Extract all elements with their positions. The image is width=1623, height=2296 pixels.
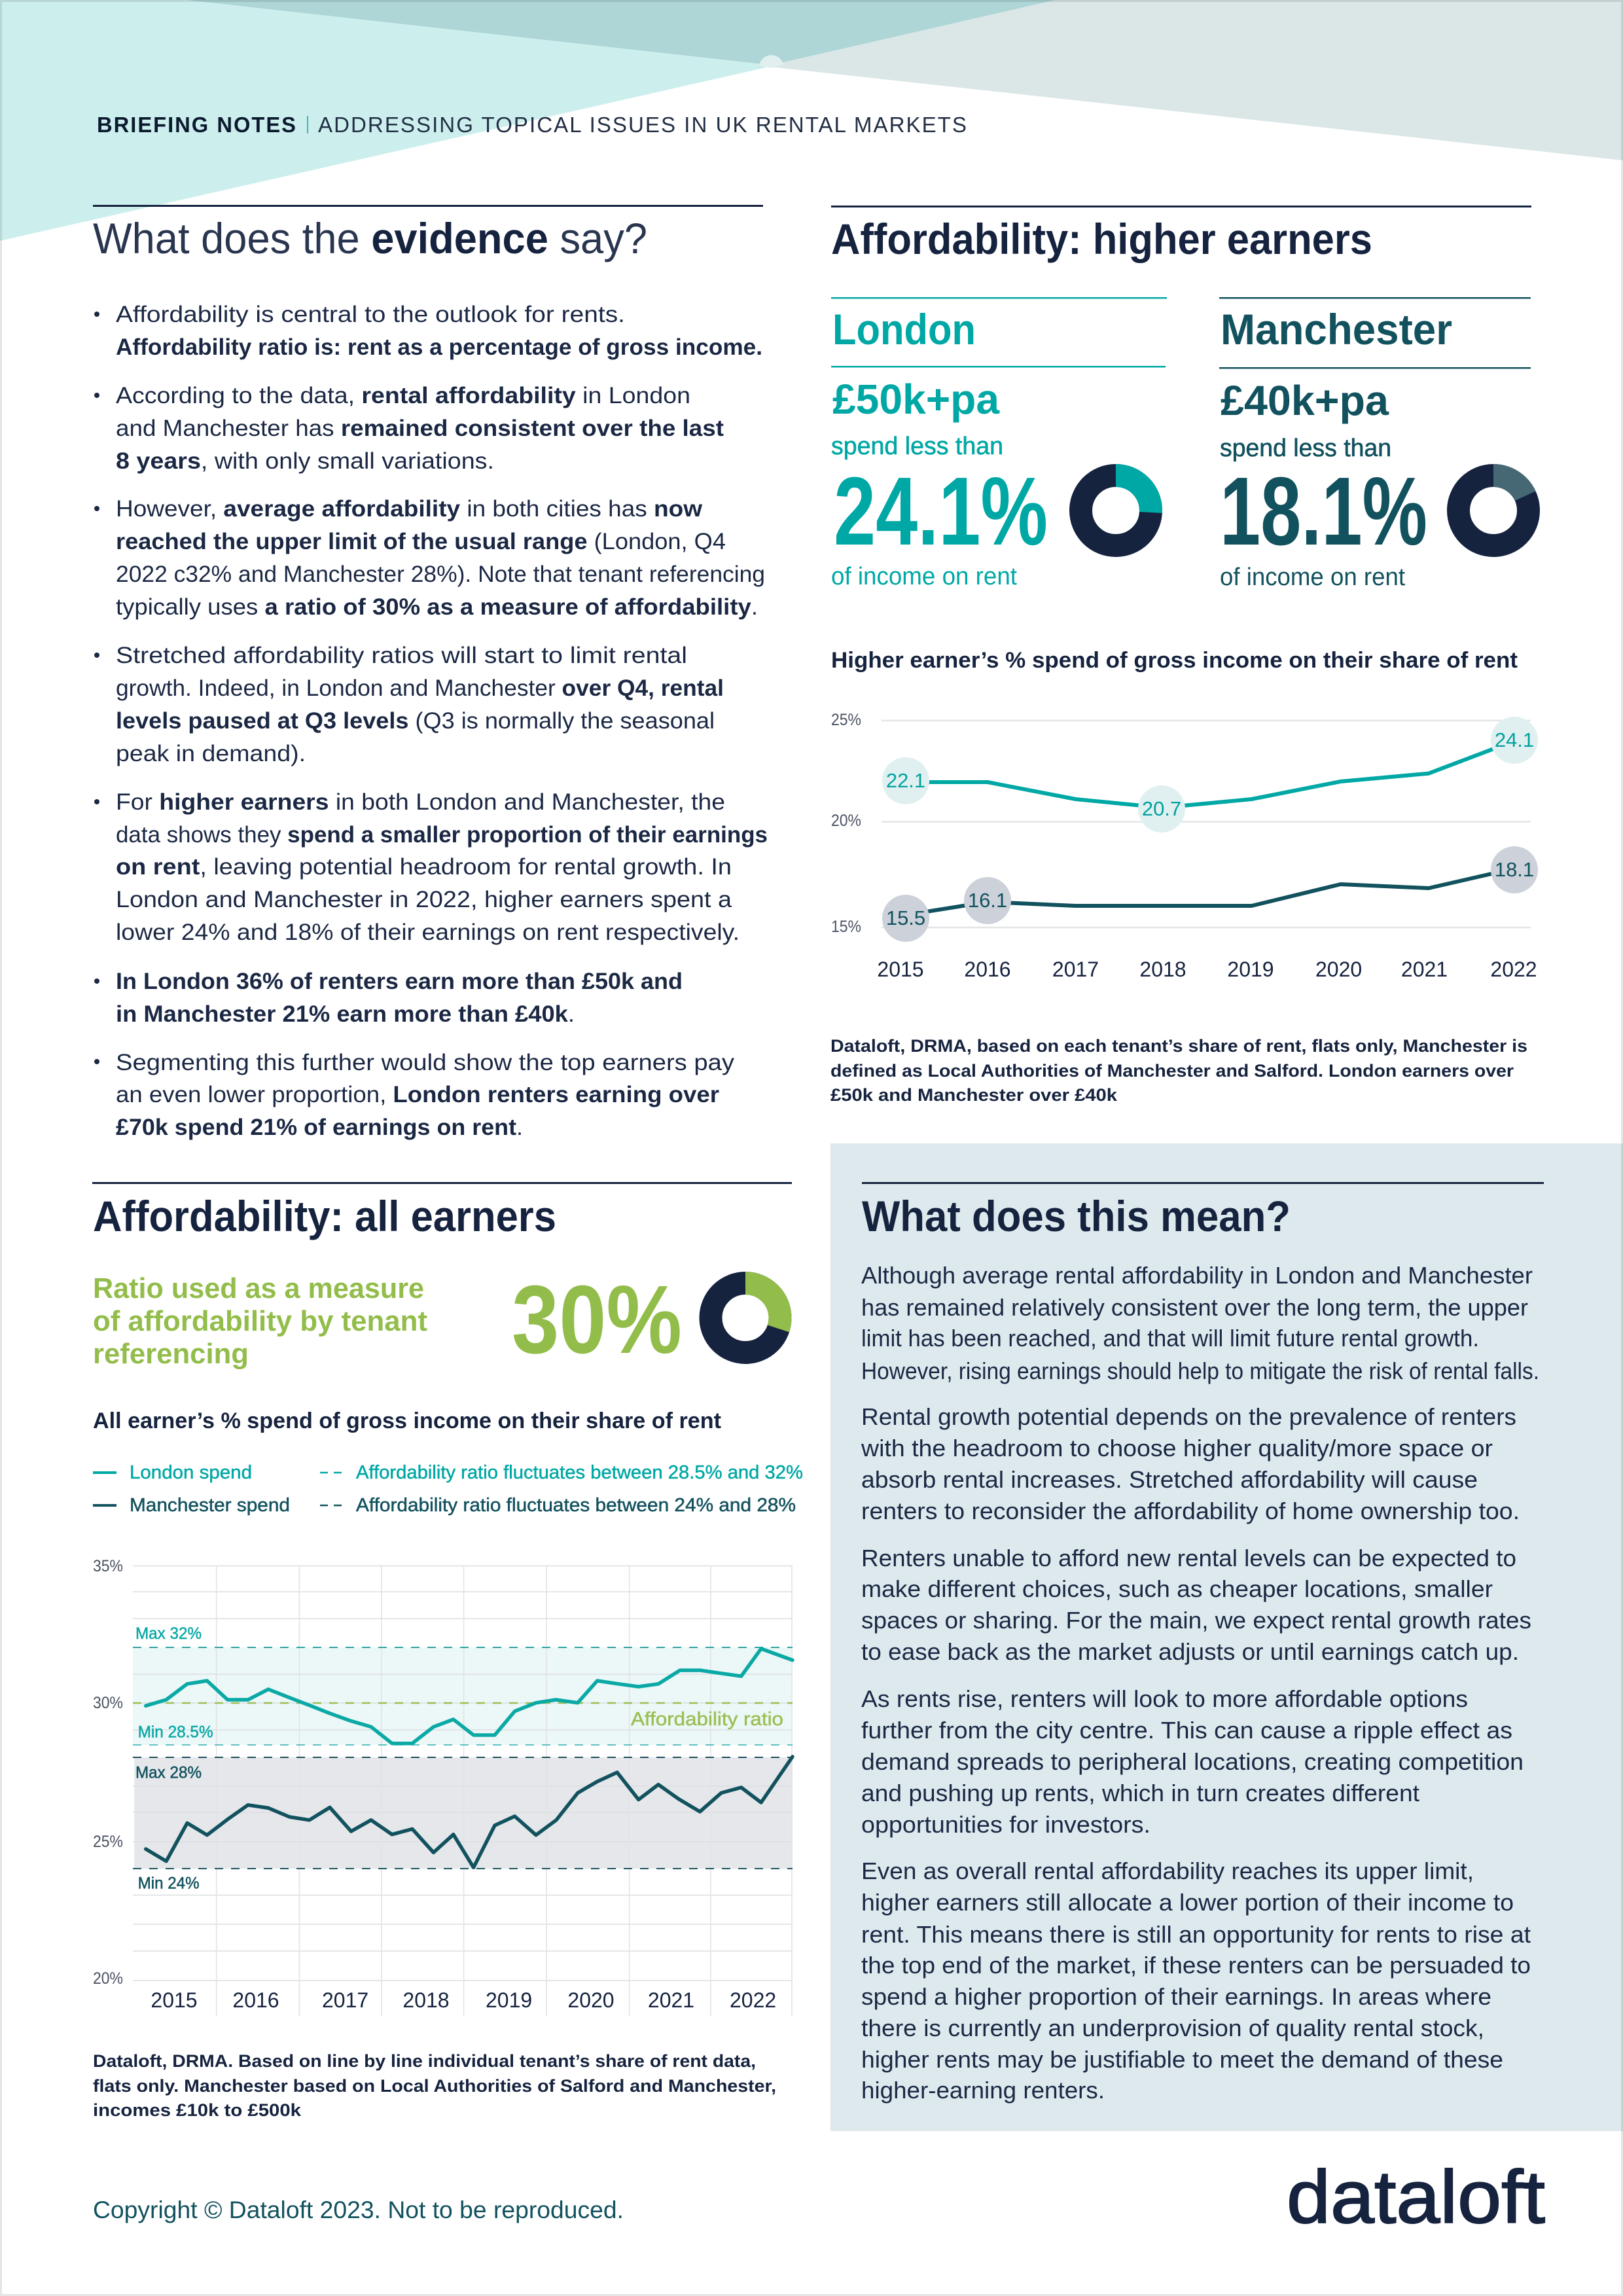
bullet list: Affordability is central to the outlook for rents.	[116, 302, 625, 327]
paragraph text: opportunities for investors.	[861, 1811, 1150, 1838]
stat: London: 24.1%	[834, 457, 1048, 565]
panel: affordability higher earners	[830, 206, 1538, 1105]
donut: Manchester 18.1%	[1458, 475, 1529, 546]
x axis years: 2019	[1227, 958, 1274, 981]
panel: what does this mean	[830, 1143, 1623, 2131]
source note: higher earners: defined as Local Authorities of Manchester and Salford. London earners over	[830, 1061, 1514, 1081]
bullet list: data shows they spend a smaller proportion of their earnings	[116, 822, 768, 848]
paragraph text: and pushing up rents, which in turn creates different	[861, 1780, 1419, 1806]
band: London range	[133, 1647, 793, 1745]
paragraph text: the top end of the market, if these renters can be persuaded to	[861, 1952, 1531, 1979]
x axis years: 2022	[1490, 958, 1537, 981]
stat label: ratio: of affordability by tenant	[93, 1305, 427, 1337]
paragraph text: higher rents may be justifiable to meet the demand of these	[861, 2046, 1503, 2073]
x axis years: 2016	[232, 1988, 279, 2012]
header title: BRIEFING NOTES	[97, 113, 297, 137]
paragraph text: spend a higher proportion of their earnings. In areas where	[861, 1983, 1491, 2010]
x axis years: 2019	[486, 1988, 532, 2012]
paragraph text: As rents rise, renters will look to more affordable options	[861, 1685, 1468, 1712]
bullet list: Affordability ratio is: rent as a percentage of gross income.	[116, 334, 762, 360]
heading: what does the evidence say: What does the evidence say?	[93, 214, 647, 262]
stat: London	[831, 297, 1167, 590]
y axis labels: 25%	[93, 1833, 123, 1851]
bullet list: For higher earners in both London and Manchester, the	[116, 789, 725, 815]
heading: affordability all earners: Affordability: all earners	[93, 1192, 556, 1240]
x axis years: 2020	[567, 1988, 615, 2012]
bullet list	[94, 302, 768, 1140]
range labels: Max 28%	[135, 1763, 202, 1782]
data bubbles: 18.1	[1495, 858, 1534, 881]
x axis years: 2018	[402, 1988, 450, 2012]
legend: London spend	[130, 1462, 252, 1483]
data bubbles: 16.1	[968, 889, 1007, 912]
paragraph text: absorb rental increases. Stretched affordability will cause	[861, 1466, 1478, 1493]
paragraph text: make different choices, such as cheaper locations, smaller	[861, 1575, 1493, 1602]
stat: London: £50k+pa	[832, 376, 999, 423]
x axis years: 2020	[1315, 958, 1362, 981]
stat: Manchester: Manchester	[1221, 305, 1452, 353]
paragraph text: with the headroom to choose higher quality/more space or	[861, 1435, 1493, 1462]
paragraph text: demand spreads to peripheral locations, creating competition	[861, 1748, 1524, 1775]
footer copyright: Copyright © Dataloft 2023. Not to be reproduced.	[93, 2197, 624, 2223]
line: London spend	[146, 1649, 793, 1744]
bullet list: in Manchester 21% earn more than £40k .	[116, 1001, 575, 1027]
stat: London: spend less than	[831, 433, 1003, 460]
y axis labels: 20%	[831, 812, 861, 830]
paragraph text: Renters unable to afford new rental levels can be expected to	[861, 1545, 1516, 1571]
y axis labels	[93, 1557, 123, 1988]
chart title: higher earners: Higher earner’s % spend of gross income on their share of rent	[831, 648, 1518, 673]
bullet list: and Manchester has remained consistent over the last	[116, 416, 724, 441]
stat label: ratio	[93, 1272, 427, 1370]
x axis years	[877, 958, 1537, 981]
line: London	[906, 741, 1514, 808]
data bubbles	[882, 717, 1538, 942]
bullet list: £70k spend 21% of earnings on rent .	[116, 1115, 523, 1140]
legend	[93, 1462, 803, 1516]
stat label: ratio: referencing	[93, 1338, 249, 1370]
panel: affordability all earners	[92, 1182, 803, 2120]
x axis years: 2021	[1401, 958, 1448, 981]
stat: Manchester	[1219, 297, 1531, 591]
y axis labels	[831, 711, 861, 936]
x axis years: 2017	[322, 1988, 368, 2012]
paragraph text: Even as overall rental affordability reaches its upper limit,	[861, 1857, 1474, 1884]
source note: all earners: incomes £10k to £500k	[93, 2100, 302, 2120]
data bubbles: 15.5	[886, 906, 925, 929]
paragraph text	[861, 1262, 1539, 2104]
bullet list: 2022 c32% and Manchester 28%). Note that tenant referencing	[116, 562, 765, 587]
source note: higher earners: Dataloft, DRMA, based on each tenant’s share of rent, flats only, Manchester is	[830, 1036, 1527, 1056]
paragraph text: there is currently an underprovision of quality rental stock,	[861, 2015, 1484, 2041]
stat: London: London	[832, 305, 976, 353]
bullet list: However, average affordability in both cities has now	[116, 496, 703, 522]
x axis years	[151, 1988, 776, 2012]
stat: 30%: 30%	[512, 1266, 682, 1374]
line chart: all earners	[93, 1557, 793, 2016]
source note: higher earners	[830, 1036, 1527, 1105]
source note: higher earners: £50k and Manchester over £40k	[830, 1085, 1118, 1105]
bullet list: peak in demand).	[116, 741, 306, 766]
x axis years: 2022	[730, 1988, 776, 2012]
paragraph text: However, rising earnings should help to mitigate the risk of rental falls.	[861, 1357, 1539, 1384]
paragraph text: spaces or sharing. For the main, we expect rental growth rates	[861, 1607, 1531, 1634]
range labels: Min 24%	[138, 1874, 200, 1893]
bullet list: 8 years , with only small variations.	[116, 448, 494, 474]
line: Manchester spend	[146, 1757, 793, 1867]
range labels: Min 28.5%	[138, 1723, 213, 1741]
legend: Affordability ratio fluctuates between 28.5% and 32%	[356, 1462, 803, 1483]
paragraph text: limit has been reached, and that will limit future rental growth.	[861, 1325, 1479, 1352]
stat label: ratio: Ratio used as a measure	[93, 1272, 424, 1304]
x axis years: 2016	[964, 958, 1011, 981]
heading: affordability higher earners: Affordability: higher earners	[831, 215, 1372, 263]
paragraph text: Although average rental affordability in London and Manchester	[861, 1262, 1533, 1289]
paragraph text: has remained relatively consistent over the long term, the upper	[861, 1294, 1528, 1321]
line chart: higher earners	[831, 711, 1538, 981]
x axis years: 2021	[648, 1988, 694, 2012]
stat: London: of income on rent	[831, 563, 1017, 590]
data bubbles: 22.1	[886, 769, 925, 792]
data bubbles: 20.7	[1142, 797, 1181, 820]
paragraph text: Rental growth potential depends on the prevalence of renters	[861, 1403, 1516, 1430]
label: affordability ratio: Affordability ratio	[631, 1709, 783, 1730]
panel: what does the evidence say	[93, 205, 768, 1140]
y axis labels: 15%	[831, 918, 861, 936]
bullet list: growth. Indeed, in London and Manchester over Q4, rental	[116, 675, 724, 701]
header banner	[0, 0, 1623, 241]
paragraph text: rent. This means there is still an opportunity for rents to rise at	[861, 1921, 1531, 1948]
x axis years: 2018	[1139, 958, 1186, 981]
band: Manchester range	[134, 1757, 793, 1869]
y axis labels: 30%	[93, 1694, 123, 1712]
stat: Manchester: 18.1%	[1220, 457, 1427, 565]
bullet list: reached the upper limit of the usual range (London, Q4	[116, 529, 726, 554]
stat: Manchester: of income on rent	[1220, 564, 1405, 591]
bullet list: an even lower proportion, London renters earning over	[116, 1082, 719, 1107]
source note: all earners: flats only. Manchester based on Local Authorities of Salford and Manchester,	[93, 2076, 776, 2096]
heading: what does this mean: What does this mean?	[862, 1192, 1291, 1240]
logo: dataloft: dataloft	[1287, 2156, 1545, 2239]
header title: ADDRESSING TOPICAL ISSUES IN UK RENTAL MARKETS	[318, 113, 968, 137]
legend: Manchester spend	[130, 1495, 290, 1516]
bullet list: According to the data, rental affordability in London	[116, 383, 690, 408]
chart title: all earners: All earner’s % spend of gross income on their share of rent	[93, 1408, 721, 1433]
legend: Affordability ratio fluctuates between 24% and 28%	[356, 1495, 796, 1516]
y axis labels: 20%	[93, 1969, 123, 1988]
stat: Manchester: £40k+pa	[1221, 377, 1389, 424]
bullet list: In London 36% of renters earn more than £50k and	[116, 969, 683, 994]
paragraph text: higher-earning renters.	[861, 2077, 1105, 2104]
paragraph text: further from the city centre. This can cause a ripple effect as	[861, 1717, 1512, 1744]
stat: Manchester: spend less than	[1220, 435, 1391, 462]
paragraph text: higher earners still allocate a lower portion of their income to	[861, 1889, 1514, 1916]
source note: all earners: Dataloft, DRMA. Based on line by line individual tenant’s share of rent data,	[93, 2051, 756, 2071]
range labels: Max 32%	[135, 1624, 202, 1643]
source note: all earners	[93, 2051, 776, 2120]
y axis labels: 35%	[93, 1557, 123, 1575]
x axis years: 2015	[151, 1988, 198, 2012]
bullet list: London and Manchester in 2022, higher earners spent a	[116, 887, 732, 912]
bullet list: on rent , leaving potential headroom for rental growth. In	[116, 854, 732, 880]
line: Manchester	[906, 869, 1514, 915]
data bubbles: 24.1	[1495, 728, 1534, 751]
donut: London 24.1%	[1081, 475, 1150, 546]
y axis labels: 25%	[831, 711, 861, 729]
bullet list: Segmenting this further would show the top earners pay	[116, 1050, 735, 1075]
x axis years: 2017	[1052, 958, 1099, 981]
bullet list: typically uses a ratio of 30% as a measure of affordability .	[116, 594, 758, 620]
bullet list: Stretched affordability ratios will start to limit rental	[116, 643, 687, 668]
x axis years: 2015	[877, 958, 924, 981]
donut: 30%	[711, 1283, 780, 1352]
paragraph text: renters to reconsider the affordability of home ownership too.	[861, 1498, 1520, 1524]
bullet list: levels paused at Q3 levels (Q3 is normally the seasonal	[116, 708, 715, 734]
bullet list: lower 24% and 18% of their earnings on rent respectively.	[116, 920, 740, 945]
paragraph text: to ease back as the market adjusts or until earnings catch up.	[861, 1638, 1519, 1665]
range labels	[135, 1624, 213, 1893]
